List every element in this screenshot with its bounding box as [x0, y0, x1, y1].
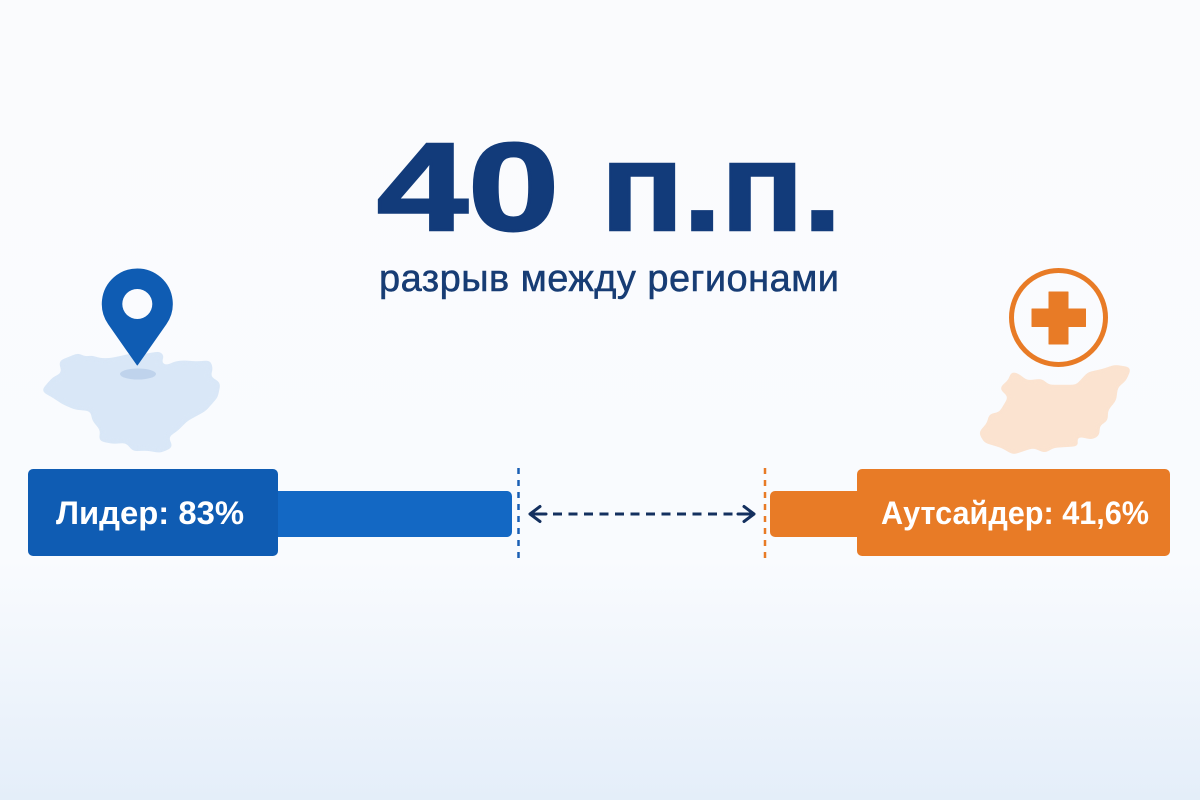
marker: leader boundary	[517, 468, 520, 559]
map: outsider region	[980, 366, 1130, 453]
bar: leader	[28, 469, 512, 556]
map: leader region	[43, 353, 219, 452]
title: 40 п.п.: 40	[377, 117, 559, 257]
marker: outsider boundary	[764, 468, 766, 559]
bar: outsider	[770, 469, 1170, 556]
subtitle: разрыв между регионами	[379, 258, 839, 300]
title: 40 п.п.	[377, 117, 841, 257]
title: 40 п.п.: п.п.	[601, 117, 841, 257]
label: leader value: Лидер: 83%	[56, 495, 244, 531]
arrow: gap between regions	[530, 506, 754, 522]
icon: location pin	[102, 269, 172, 380]
label: outsider value: Аутсайдер: 41,6%	[881, 495, 1149, 531]
icon: medical cross in circle	[1012, 270, 1106, 364]
